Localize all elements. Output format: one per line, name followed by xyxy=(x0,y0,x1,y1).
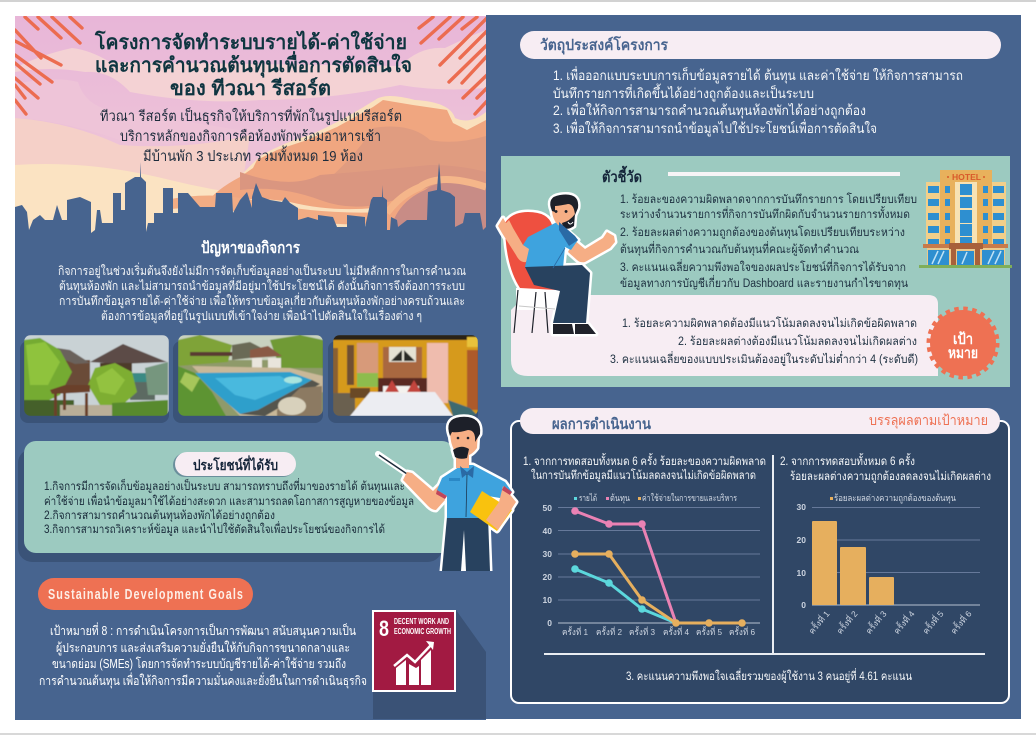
series: selling and admin expense xyxy=(571,550,746,627)
line chart: error percentage: ครั้งที่ 5 xyxy=(696,626,722,637)
objectives list: 2. เพื่อให้กิจการสามารถคำนวณต้นทุนห้องพักได้อย่างถูกต้อง xyxy=(553,101,866,119)
badge: target starburst: เป้า xyxy=(953,331,973,348)
chart 1 legend: ต้นทุน xyxy=(610,493,630,504)
bar chart: cost accuracy difference: 20 xyxy=(797,535,806,545)
chart 1 title: 1. จากการทดสอบทั้งหมด 6 ครั้ง ร้อยละของความผิดพลาด xyxy=(523,453,766,468)
right panel background xyxy=(486,15,1021,719)
line chart: error percentage: 50 xyxy=(543,503,552,513)
objectives list: บันทึกรายการที่เกิดขึ้นได้อย่างถูกต้องและเป็นระบบ xyxy=(553,83,814,102)
chart 1 legend xyxy=(574,493,737,504)
decorative corner stripes xyxy=(15,17,487,114)
line chart: error percentage: ครั้งที่ 2 xyxy=(596,626,622,637)
indicators list: 2. ร้อยละผลต่างความถูกต้องของต้นทุนโดยเปรียบเทียบระหว่าง xyxy=(620,225,905,239)
chart 2 title: 2. จากการทดสอบทั้งหมด 6 ครั้ง xyxy=(780,453,915,468)
indicators list: ต้นทุนที่กิจการคำนวณกับต้นทุนที่คณะผู้จัดทำคำนวณ xyxy=(620,241,859,256)
title: และการคำนวณต้นทุนเพื่อการตัดสินใจ xyxy=(95,50,412,78)
series: revenue xyxy=(571,565,676,623)
bar chart: cost accuracy difference: 0 xyxy=(801,600,806,610)
objectives list: 1. เพื่อออกแบบระบบการเก็บข้อมูลรายได้ ต้นทุน และค่าใช้จ่าย ให้กิจการสามารถ xyxy=(553,66,963,84)
chart 1 legend: รายได้ xyxy=(579,493,597,503)
indicators heading: ตัวชี้วัด xyxy=(602,165,642,186)
bar chart: cost accuracy difference: 10 xyxy=(797,568,806,578)
panel: benefits xyxy=(18,441,454,562)
line chart: error percentage: 40 xyxy=(543,526,552,536)
line chart: error percentage: 0 xyxy=(547,618,552,628)
target list xyxy=(610,316,918,366)
problem body text: การบันทึกข้อมูลรายได้-ค่าใช้จ่าย เพื่อให้ทราบข้อมูลเกี่ยวกับต้นทุนห้องพักอย่างครบถ้วนและ xyxy=(59,292,465,309)
badge: target starburst: หมาย xyxy=(948,345,978,362)
bar chart: cost accuracy difference: ครั้งที่ 4 xyxy=(891,608,917,636)
title: โครงการจัดทำระบบรายได้-ค่าใช้จ่าย xyxy=(94,30,407,54)
benefits list: 2.กิจการสามารถคำนวณต้นทุนห้องพักได้อย่างถูกต้อง xyxy=(44,509,275,522)
SDG goal description: ผู้ประกอบการ และส่งเสริมความยั่งยืนให้กับกิจการขนาดกลางและ xyxy=(56,639,350,656)
satisfaction score result: 3. คะแนนความพึงพอใจเฉลี่ยรวมของผู้ใช้งาน 3 คนอยู่ที่ 4.61 คะแนน xyxy=(626,668,912,683)
achievement note: บรรลุผลตามเป้าหมาย xyxy=(869,412,988,429)
objectives list xyxy=(553,66,963,137)
illustration: teacher with pointer and folder xyxy=(378,417,516,571)
line chart: error percentage: 30 xyxy=(543,549,552,559)
problem body text xyxy=(58,262,466,324)
bar chart: cost accuracy difference: ครั้งที่ 6 xyxy=(948,608,974,636)
benefits heading pill: ประโยชน์ที่ได้รับ xyxy=(193,455,278,473)
line chart: error percentage: ครั้งที่ 4 xyxy=(663,626,689,637)
chart 1 title xyxy=(523,453,766,482)
icon: SDG 8 decent work and economic growth: DECENT WORK AND xyxy=(394,617,449,626)
line chart: error percentage: ครั้งที่ 3 xyxy=(629,626,655,637)
benefits heading pill xyxy=(173,452,296,477)
target list: 3. คะแนนเฉลี่ยของแบบประเมินต้องอยู่ในระดับไม่ต่ำกว่า 4 (ระดับดี) xyxy=(610,351,918,366)
city skyline silhouette xyxy=(15,162,486,260)
SDG icon long shadow xyxy=(373,610,486,719)
panel: objectives heading xyxy=(520,31,1001,59)
target list: 1. ร้อยละความผิดพลาดต้องมีแนวโน้มลดลงจนไม่เกิดข้อผิดพลาด xyxy=(622,316,917,330)
benefits list: 1.กิจการมีการจัดเก็บข้อมูลอย่างเป็นระบบ สามารถทราบถึงที่มาของรายได้ ต้นทุนและ xyxy=(44,478,405,493)
indicators list: ระหว่างจำนวนรายการที่กิจการบันทึกผิดกับจำนวนรายการทั้งหมด xyxy=(620,206,910,221)
SDG heading pill: Sustainable Development Goals xyxy=(48,586,244,603)
page top rule xyxy=(0,0,1036,2)
objectives list: 3. เพื่อให้กิจการสามารถนำข้อมูลไปใช้ประโยชน์เพื่อการตัดสินใจ xyxy=(553,119,877,137)
icon: hotel building xyxy=(919,170,1012,268)
results heading: ผลการดำเนินงาน xyxy=(552,415,652,433)
icon: SDG 8 decent work and economic growth: ECONOMIC GROWTH xyxy=(394,627,451,636)
chart 1 title: ในการบันทึกข้อมูลมีแนวโน้มลดลงจนไม่เกิดข้อผิดพลาด xyxy=(531,468,756,482)
badge: target starburst xyxy=(929,309,997,377)
panel: target box xyxy=(511,295,938,376)
panel: objectives heading: วัตถุประสงค์โครงการ xyxy=(540,35,669,55)
business description xyxy=(100,106,402,165)
line chart: error percentage: ครั้งที่ 1 xyxy=(562,626,588,637)
panel: results xyxy=(511,408,1009,703)
problem body text: กิจการอยู่ในช่วงเริ่มต้นจึงยังไม่มีการจัดเก็บข้อมูลอย่างเป็นระบบ ไม่มีหลักการในการคำนวณ xyxy=(58,262,466,279)
SDG goal description xyxy=(39,622,367,689)
line chart: error percentage: ครั้งที่ 6 xyxy=(729,626,755,637)
bar chart: cost accuracy difference: ครั้งที่ 5 xyxy=(920,608,946,636)
benefits list xyxy=(44,478,414,536)
SDG goal description: เป้าหมายที่ 8 : การดำเนินโครงการเป็นการพัฒนา สนับสนุนความเป็น xyxy=(50,622,356,639)
left panel background xyxy=(15,16,486,720)
sunset sky illustration xyxy=(15,16,487,246)
target list: 2. ร้อยละผลต่างต้องมีแนวโน้มลดลงจนไม่เกิดผลต่าง xyxy=(678,334,917,348)
panel: indicators xyxy=(501,156,1010,387)
series: cost xyxy=(571,507,676,623)
line chart: error percentage xyxy=(543,493,760,637)
SDG heading pill xyxy=(38,578,253,610)
icon: hotel building: HOTEL xyxy=(952,173,981,182)
indicators list: 3. คะแนนเฉลี่ยความพึงพอใจของผลประโยชน์ที่กิจการได้รับจาก xyxy=(620,259,906,274)
benefits list: 3.กิจการสามารถวิเคราะห์ข้อมูล และนำไปใช้ตัดสินใจเพื่อประโยชน์ของกิจการได้ xyxy=(44,521,385,536)
indicators list xyxy=(620,192,917,290)
benefits list: ค่าใช้จ่าย เพื่อนำข้อมูลมาใช้ได้อย่างสะดวก และสามารถลดโอกาสการสูญหายของข้อมูล xyxy=(44,493,414,508)
title: ของ ทีวณา รีสอร์ต xyxy=(170,77,331,100)
bar chart: cost accuracy difference: ครั้งที่ 1 xyxy=(806,608,832,636)
business description: ทีวณา รีสอร์ต เป็นธุรกิจให้บริการที่พักในรูปแบบรีสอร์ต xyxy=(100,106,402,125)
chart 2 title xyxy=(780,453,991,483)
indicators list: ข้อมูลทางการบัญชีเกี่ยวกับ Dashboard และรายงานกำไรขาดทุน xyxy=(620,275,908,290)
SDG goal description: ขนาดย่อม (SMEs) โดยการจัดทำระบบบัญชีรายได้-ค่าใช้จ่าย รวมถึง xyxy=(52,656,346,671)
chart 2 title: ร้อยละผลต่างความถูกต้องลดลงจนไม่เกิดผลต่าง xyxy=(790,470,991,483)
page bottom rule xyxy=(0,733,1036,735)
indicators list: 1. ร้อยละของความผิดพลาดจากการบันทึกรายการ โดยเปรียบเทียบ xyxy=(620,192,917,206)
icon: SDG 8 decent work and economic growth: 8 xyxy=(379,616,389,641)
business description: บริการหลักของกิจการคือห้องพักพร้อมอาหารเช้า xyxy=(120,128,381,145)
title xyxy=(94,30,412,100)
bar chart: cost accuracy difference: ครั้งที่ 3 xyxy=(863,608,889,636)
bar chart: cost accuracy difference: 30 xyxy=(797,502,806,512)
bar chart: cost accuracy difference: ครั้งที่ 2 xyxy=(834,608,860,636)
problem heading: ปัญหาของกิจการ xyxy=(201,239,300,258)
illustration: seated man on red chair xyxy=(498,195,615,334)
SDG goal description: การคำนวณต้นทุน เพื่อให้กิจการมีความมั่นคงและยั่งยืนในการดำเนินธุรกิจ xyxy=(39,672,367,689)
line chart: error percentage: 20 xyxy=(543,572,552,582)
icon: SDG 8 decent work and economic growth xyxy=(372,610,456,692)
chart 2 legend: ร้อยละผลต่างความถูกต้องของต้นทุน xyxy=(834,493,956,504)
photo: bedroom xyxy=(333,335,478,416)
photo: resort houses xyxy=(24,335,169,416)
problem body text: ต้นทุนห้องพัก และไม่สามารถนำข้อมูลที่มีอยู่มาใช้ประโยชน์ได้ ดังนั้นกิจการจึงต้องการระบบ xyxy=(59,277,465,294)
business description: มีบ้านพัก 3 ประเภท รวมทั้งหมด 19 ห้อง xyxy=(143,145,363,165)
photo: swimming pool xyxy=(178,335,323,416)
line chart: error percentage: 10 xyxy=(543,595,552,605)
bar chart: cost accuracy difference xyxy=(797,493,980,636)
photo strip xyxy=(20,335,478,423)
chart 1 legend: ค่าใช้จ่ายในการขายและบริหาร xyxy=(642,493,737,503)
results heading pill xyxy=(520,408,1000,434)
problem body text: ต้องการข้อมูลที่อยู่ในรูปแบบที่เข้าใจง่าย เพื่อนำไปตัดสินใจในเรื่องต่าง ๆ xyxy=(101,307,422,324)
